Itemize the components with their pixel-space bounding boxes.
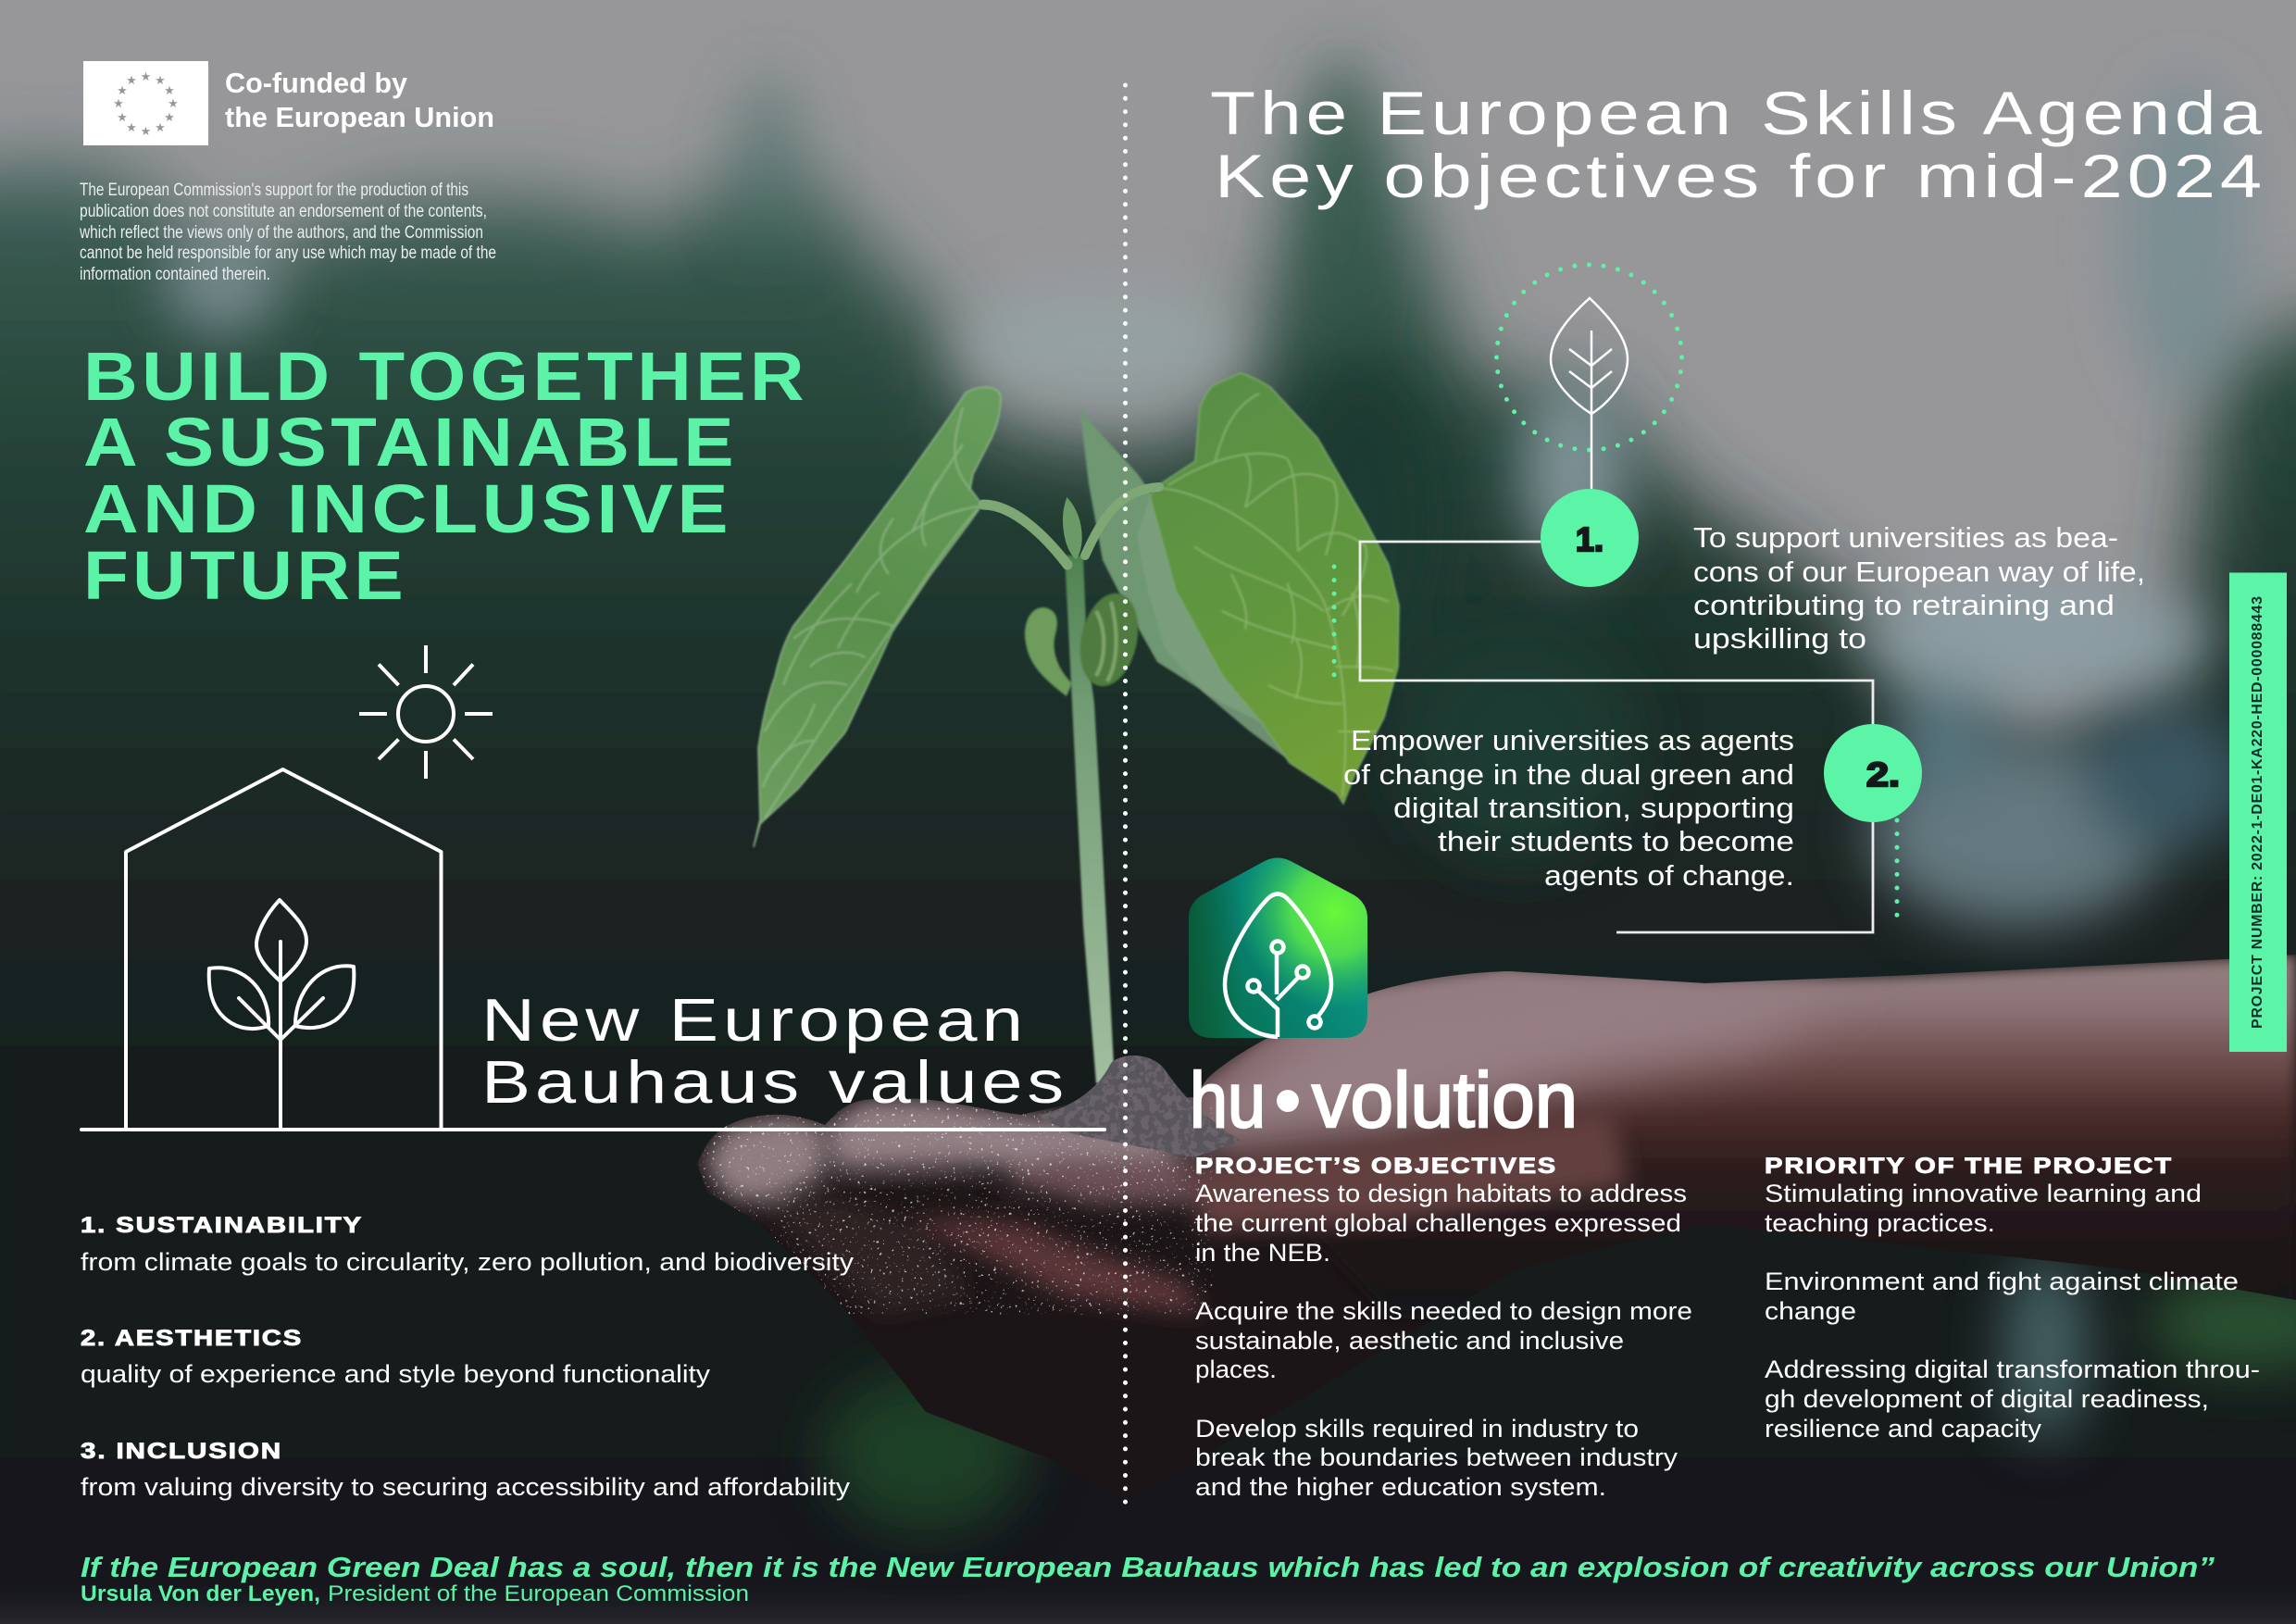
- value 2: quality of experience and style beyond functionality: [81, 1360, 711, 1388]
- value 1: [81, 1213, 855, 1276]
- column: priority of the project: Environment and fight against climate: [1765, 1268, 2239, 1295]
- project number tab: PROJECT NUMBER: 2022-1-DE01-KA220-HED-000088443: [2250, 595, 2265, 1029]
- column: project's objectives: Develop skills required in industry to: [1195, 1415, 1639, 1443]
- heading: New European Bauhaus values: [481, 986, 1068, 1116]
- badge 2: [1824, 724, 1922, 822]
- EU logo block: [83, 61, 494, 145]
- value 3: 3. INCLUSION: [81, 1439, 282, 1464]
- badge 2: 2.: [1866, 756, 1900, 793]
- column: project's objectives: in the NEB.: [1195, 1239, 1330, 1267]
- cotyledons: [1025, 588, 1146, 696]
- value 2: [81, 1326, 711, 1388]
- petioles and central bud: [983, 487, 1159, 565]
- value 3: [81, 1439, 851, 1501]
- disclaimer text: [79, 181, 496, 284]
- objective 1: [1541, 489, 2145, 655]
- disclaimer text: cannot be held responsible for any use which may be made of the: [80, 244, 496, 263]
- objective 1 text: upskilling to: [1693, 622, 1866, 655]
- objective 1 text: contributing to retraining and: [1693, 589, 2115, 621]
- photo: cupped hand holding soil: [697, 955, 2296, 1463]
- objective 1 text: cons of our European way of life,: [1693, 556, 2145, 588]
- EU flag: ★: [155, 120, 166, 134]
- objective 2 text: their students to become: [1438, 825, 1794, 857]
- objective 2: [1343, 724, 1922, 892]
- objective 1 text: [1693, 521, 2145, 655]
- column: project's objectives: and the higher education system.: [1195, 1473, 1606, 1501]
- EU flag: ★: [126, 73, 137, 87]
- quote attribution: [81, 1581, 749, 1606]
- back pale leaf: [1079, 407, 1261, 722]
- left leaf: [754, 387, 1001, 847]
- right leaf: [1137, 373, 1399, 804]
- quote attribution: President of the European Commission: [328, 1581, 749, 1606]
- column: project's objectives: Awareness to design habitats to address: [1195, 1180, 1687, 1207]
- EU co-funding label: the European Union: [225, 101, 494, 133]
- column: project's objectives: the current global challenges expressed: [1195, 1209, 1681, 1237]
- heading: European Skills Agenda: [1210, 79, 2266, 210]
- EU flag: ★: [141, 69, 151, 83]
- heading: New European Bauhaus values: New European: [481, 986, 1028, 1054]
- logo: huvolution wordmark: •: [1274, 1056, 1302, 1143]
- soil mound: [1037, 1056, 1241, 1157]
- disclaimer text: information contained therein.: [80, 265, 270, 284]
- EU flag: ★: [164, 110, 175, 124]
- heading: European Skills Agenda: The European Skills Agenda: [1210, 79, 2266, 147]
- icon: house with plant and ground line: [81, 769, 1104, 1130]
- heading: European Skills Agenda: Key objectives for mid-2024: [1215, 142, 2266, 210]
- column: project's objectives: break the boundaries between industry: [1195, 1443, 1678, 1471]
- logo: huvolution wordmark: volution: [1312, 1056, 1578, 1143]
- objective 1 text: To support universities as bea-: [1693, 521, 2118, 554]
- column: priority of the project: PRIORITY OF THE PROJECT: [1765, 1154, 2173, 1179]
- column: project's objectives: [1195, 1154, 1692, 1501]
- main title: A SUSTAINABLE: [83, 404, 738, 481]
- stem: [1065, 556, 1115, 1083]
- icon: sun: [359, 645, 493, 779]
- EU co-funding label: Co-funded by: [225, 67, 408, 99]
- EU flag: ★: [164, 83, 175, 97]
- quote attribution: Ursula Von der Leyen,: [81, 1581, 320, 1606]
- disclaimer text: which reflect the views only of the authors, and the Commission: [79, 223, 483, 243]
- project number tab: [2229, 572, 2287, 1052]
- column: project's objectives: PROJECT’S OBJECTIVES: [1195, 1154, 1557, 1179]
- logo: huvolution wordmark: hu: [1190, 1056, 1266, 1143]
- pale fold of right leaf: [1137, 496, 1285, 757]
- EU flag: ★: [141, 124, 151, 138]
- dotted central divider: [1123, 85, 1128, 1509]
- value 1: 1. SUSTAINABILITY: [81, 1213, 363, 1238]
- column: project's objectives: sustainable, aesthetic and inclusive: [1195, 1327, 1624, 1355]
- column: priority of the project: change: [1765, 1297, 1856, 1325]
- icon: leaf in dotted circle: [1496, 265, 1681, 489]
- value 3: from valuing diversity to securing accessibility and affordability: [81, 1473, 851, 1501]
- connector line between objectives: [1360, 542, 1873, 932]
- column: project's objectives: Acquire the skills needed to design more: [1195, 1297, 1692, 1325]
- logo: huvolution wordmark: [1190, 1056, 1578, 1143]
- logo: huvolution house icon: [1189, 857, 1367, 1038]
- main title: AND INCLUSIVE: [83, 470, 732, 547]
- EU flag: ★: [113, 96, 124, 110]
- disclaimer text: publication does not constitute an endorsement of the contents,: [80, 202, 487, 221]
- column: priority of the project: [1765, 1154, 2260, 1443]
- objective 2 text: digital transition, supporting: [1393, 792, 1794, 824]
- quote: [81, 1551, 2215, 1606]
- objective 2 text: [1343, 724, 1794, 892]
- EU co-funding label: [225, 67, 494, 133]
- objective 2 text: agents of change.: [1544, 859, 1794, 892]
- green dotted accents: [1334, 567, 1897, 917]
- heading: New European Bauhaus values: Bauhaus values: [481, 1048, 1068, 1116]
- plant in house: [209, 900, 354, 1130]
- column: priority of the project: Addressing digital transformation throu-: [1765, 1355, 2260, 1383]
- badge 1: [1541, 489, 1639, 587]
- EU flag: ★: [126, 120, 137, 134]
- sand speckles: [690, 1107, 1213, 1315]
- column: priority of the project: Stimulating innovative learning and: [1765, 1180, 2202, 1207]
- EU flag: ★: [117, 83, 128, 97]
- EU flag: ★: [168, 96, 179, 110]
- main title: [83, 338, 808, 614]
- forearm and palm: [1185, 955, 2296, 1315]
- disclaimer text: The European Commission's support for the production of this: [80, 181, 468, 200]
- objective 2 text: of change in the dual green and: [1343, 758, 1794, 791]
- palm highlight: [1176, 963, 1852, 1157]
- value 1: from climate goals to circularity, zero pollution, and biodiversity: [81, 1248, 855, 1276]
- EU flag: ★: [155, 73, 166, 87]
- EU flag: ★: [117, 110, 128, 124]
- column: priority of the project: gh development of digital readiness,: [1765, 1385, 2209, 1413]
- main title: FUTURE: [83, 537, 407, 614]
- main title: BUILD TOGETHER: [83, 338, 808, 415]
- column: project's objectives: places.: [1195, 1355, 1277, 1383]
- objective 2 text: Empower universities as agents: [1351, 724, 1794, 756]
- list: New European Bauhaus values: [81, 1213, 855, 1501]
- EU flag: [83, 61, 208, 145]
- value 2: 2. AESTHETICS: [81, 1326, 303, 1351]
- column: priority of the project: resilience and capacity: [1765, 1415, 2042, 1443]
- photo: plant seedling: [754, 373, 1399, 1083]
- quote: If the European Green Deal has a soul, then it is the New European Bauhaus which has led to an explosion of creativity across our Union”: [81, 1551, 2215, 1583]
- column: priority of the project: teaching practices.: [1765, 1209, 1995, 1237]
- badge 1: 1.: [1576, 520, 1603, 558]
